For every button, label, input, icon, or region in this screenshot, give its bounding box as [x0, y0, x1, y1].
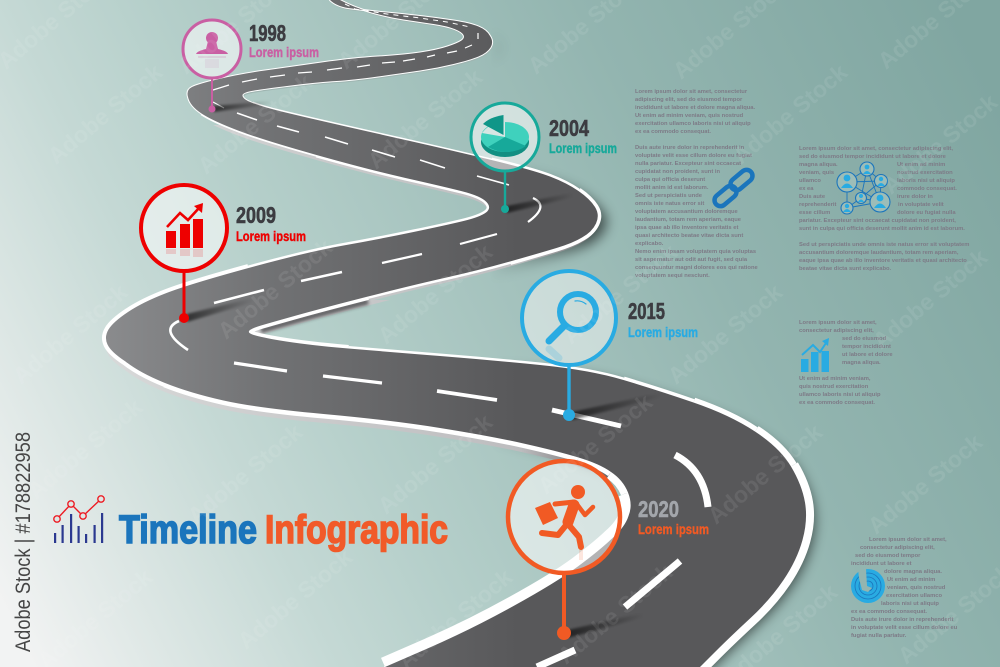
text block: lower right column: sed do eiusmod tempor — [855, 553, 921, 559]
icon: running man with briefcase — [535, 485, 593, 560]
text block: middle right column: Ut enim ad minim veniam, — [799, 376, 871, 382]
watermark pattern: Adobe Stock — [193, 69, 317, 179]
watermark pattern: Adobe Stock — [868, 244, 992, 354]
road — [106, 0, 815, 667]
label: 2020 — [638, 496, 709, 537]
text block: left column: mollit anim id est laborum. — [635, 185, 709, 191]
label: 2004: 2004 — [549, 115, 589, 141]
text block: upper right column: veniam, quis — [799, 170, 834, 176]
watermark pattern: Adobe Stock — [213, 234, 337, 344]
text block: left column: Duis aute irure dolor in reprehenderit in — [635, 145, 745, 151]
label: 2004: Lorem ipsum — [549, 140, 617, 156]
icon: chain link — [712, 167, 755, 209]
icon: magnifier — [549, 294, 596, 358]
pin: 2009 — [141, 185, 254, 323]
watermark pattern: Adobe Stock — [373, 239, 497, 349]
label: 2015: 2015 — [628, 298, 665, 324]
text block: left column: sit aspernatur aut odit aut fugit, sed quia — [635, 257, 748, 263]
label: 2020: Lorem ipsum — [638, 521, 709, 537]
watermark pattern: Adobe Stock — [878, 89, 1000, 199]
title — [119, 508, 448, 552]
text block: lower right column: incididunt ut labore et — [851, 561, 912, 567]
icon: rising bar chart — [166, 203, 203, 257]
pin: 2020 — [508, 461, 644, 640]
watermark pattern: Adobe Stock — [553, 559, 677, 667]
text block: left column: exercitation ullamco laboris nisi ut aliquip — [635, 121, 751, 127]
text block: upper right column: Lorem ipsum dolor sit amet, consectetur adipiscing elit, — [799, 146, 953, 152]
text block: middle right column: ex ea commodo consequat. — [799, 400, 875, 406]
text block: middle right column: ut labore et dolore — [842, 352, 893, 358]
icon: people network — [837, 162, 890, 214]
text block: left column: Sed ut perspiciatis unde — [635, 193, 703, 199]
text block: left column: Ut enim ad minim veniam, quis nostrud — [635, 113, 744, 119]
text block: upper right column: in voluptate velit — [898, 202, 944, 208]
text block: upper right column: esse cillum — [799, 210, 830, 216]
label: 1998 — [249, 20, 319, 60]
text block: upper right column: reprehenderit — [799, 202, 836, 208]
watermark pattern: Adobe Stock — [23, 394, 147, 504]
text block: lower right column: dolore magna aliqua. — [884, 569, 942, 575]
text block: upper right column: magna aliqua. — [799, 162, 838, 168]
text block: left column: adipiscing elit, sed do eiusmod tempor — [635, 97, 743, 103]
text block: middle right column: consectetur adipiscing elit, — [799, 328, 874, 334]
text block: upper right column: ex ea — [799, 186, 814, 192]
text block: left column: voluptatem sequi nesciunt. — [635, 273, 710, 279]
text block: lower right column: exercitation ullamco — [886, 593, 943, 599]
text block: lower right column: ex ea commodo consequat. — [851, 609, 927, 615]
text block: left column: explicabo. — [635, 241, 664, 247]
watermark pattern: Adobe Stock — [728, 59, 852, 169]
text block: lower right column: fugiat nulla pariatur. — [851, 633, 907, 639]
text block: lower right column: Lorem ipsum dolor sit amet, — [869, 537, 947, 543]
text block: middle right column: magna aliqua. — [842, 360, 881, 366]
stock credit: Adobe Stock | #178822958 — [12, 432, 35, 652]
watermark pattern: Adobe Stock — [8, 279, 132, 389]
text block: left column: quasi architecto beatae vitae dicta sunt — [635, 233, 743, 239]
icon: blue bar chart — [801, 338, 829, 372]
text block: lower right column: laboris nisi ut aliquip — [881, 601, 939, 607]
text block: upper right column: pariatur. Excepteur sint occaecat cupidatat non proident, — [799, 218, 956, 224]
text block: left column: Nemo enim ipsam voluptatem quia voluptas — [635, 249, 756, 255]
title icon: line over bars — [54, 496, 104, 543]
text block: upper right column — [799, 146, 969, 272]
text block: middle right column: Lorem ipsum dolor sit amet, — [799, 320, 877, 326]
text block: left column — [635, 89, 758, 279]
pin: 1998 — [183, 20, 272, 112]
text block: lower right column: Duis aute irure dolor in reprehenderit — [851, 617, 954, 623]
text block: upper right column: Duis aute — [799, 194, 826, 200]
text block: lower right column: veniam, quis nostrud — [887, 585, 946, 591]
watermark pattern: Adobe Stock — [533, 389, 657, 499]
text block: upper right column: laboris nisi ut aliquip — [897, 178, 955, 184]
text block: lower right column — [851, 537, 958, 639]
watermark pattern: Adobe Stock — [373, 409, 497, 519]
text block: left column: voluptatem accusantium doloremque — [635, 209, 739, 215]
text block: left column: cupidatat non proident, sunt in — [635, 169, 720, 175]
text block: middle right column: quis nostrud exercitation — [799, 384, 869, 390]
text block: upper right column: Sed ut perspiciatis unde omnis iste natus error sit voluptatem — [799, 242, 969, 248]
text block: upper right column: sunt in culpa qui officia deserunt mollit anim id est laborum. — [799, 226, 965, 232]
label: 2009 — [236, 202, 306, 244]
text block: upper right column: beatae vitae dicta sunt explicabo. — [799, 266, 892, 272]
text block: left column: culpa qui officia deserunt — [635, 177, 705, 183]
watermark pattern: Adobe Stock — [363, 64, 487, 174]
text block: left column: nulla pariatur. Excepteur sint occaecat — [635, 161, 741, 167]
pin: 2004 — [471, 103, 574, 213]
text block: left column: laudantium, totam rem aperiam, eaque — [635, 217, 742, 223]
text block: lower right column: consectetur adipiscing elit, — [860, 545, 935, 551]
text block: upper right column: ullamco — [799, 178, 821, 184]
text block: left column: omnis iste natus error sit — [635, 201, 704, 207]
label: 2009: Lorem ipsum — [236, 228, 306, 244]
text block: middle right column: ullamco laboris nisi ut aliquip — [799, 392, 881, 398]
pin: 2015 — [522, 271, 662, 421]
watermark pattern: Adobe Stock — [863, 429, 987, 539]
icon: pie chart — [481, 115, 529, 157]
text block: left column: voluptate velit esse cillum dolore eu fugiat — [635, 153, 752, 159]
road centre dashes — [170, 4, 708, 667]
text block: upper right column: dolore eu fugiat nulla — [897, 210, 956, 216]
icon: radial chart — [851, 569, 885, 603]
title: Infographic — [265, 508, 448, 552]
watermark pattern: Adobe Stock — [183, 419, 307, 529]
text block: upper right column: eaque ipsa quae ab illo inventore veritatis et quasi architecto — [799, 258, 967, 264]
watermark pattern: Adobe Stock — [663, 279, 787, 389]
label: 2015 — [628, 298, 698, 340]
text block: upper right column: Ut enim ad minim — [897, 162, 945, 168]
text block: upper right column: nostrud exercitation — [897, 170, 953, 176]
label: 2009: 2009 — [236, 202, 276, 228]
watermark pattern: Adobe Stock — [558, 239, 682, 349]
label: 1998: 1998 — [249, 20, 286, 46]
text block: upper right column: sed do eiusmod tempor incididunt ut labore et dolore — [799, 154, 947, 160]
watermark pattern: Adobe Stock — [43, 59, 167, 169]
watermark pattern: Adobe Stock — [233, 544, 357, 654]
label: 2015: Lorem ipsum — [628, 324, 698, 340]
text block: middle right column: tempor incididunt — [842, 344, 891, 350]
text block: upper right column: accusantium doloremque laudantium, totam rem aperiam, — [799, 250, 959, 256]
text block: left column: Lorem ipsum dolor sit amet, consectetur — [635, 89, 748, 95]
text block: left column: consequuntur magni dolores eos qui ratione — [635, 265, 758, 271]
text block: lower right column: in voluptate velit esse cillum dolore eu — [851, 625, 958, 631]
text block: left column: ex ea commodo consequat. — [635, 129, 711, 135]
text block: middle right column — [799, 320, 893, 406]
text block: left column: ipsa quae ab illo inventore veritatis et — [635, 225, 738, 231]
text block: lower right column: Ut enim ad minim — [887, 577, 935, 583]
icon: stamp person — [196, 32, 228, 68]
watermark pattern: Adobe Stock — [703, 419, 827, 529]
label: 2020: 2020 — [638, 496, 679, 522]
title: Timeline — [119, 508, 257, 552]
text block: left column: incididunt ut labore et dolore magna aliqua. — [635, 105, 756, 111]
text block: middle right column: sed do eiusmod — [842, 336, 887, 342]
label: 1998: Lorem ipsum — [249, 44, 319, 60]
text block: upper right column: commodo consequat. — [897, 186, 957, 192]
text block: upper right column: irure dolor in — [897, 194, 933, 200]
label: 2004 — [549, 115, 617, 156]
